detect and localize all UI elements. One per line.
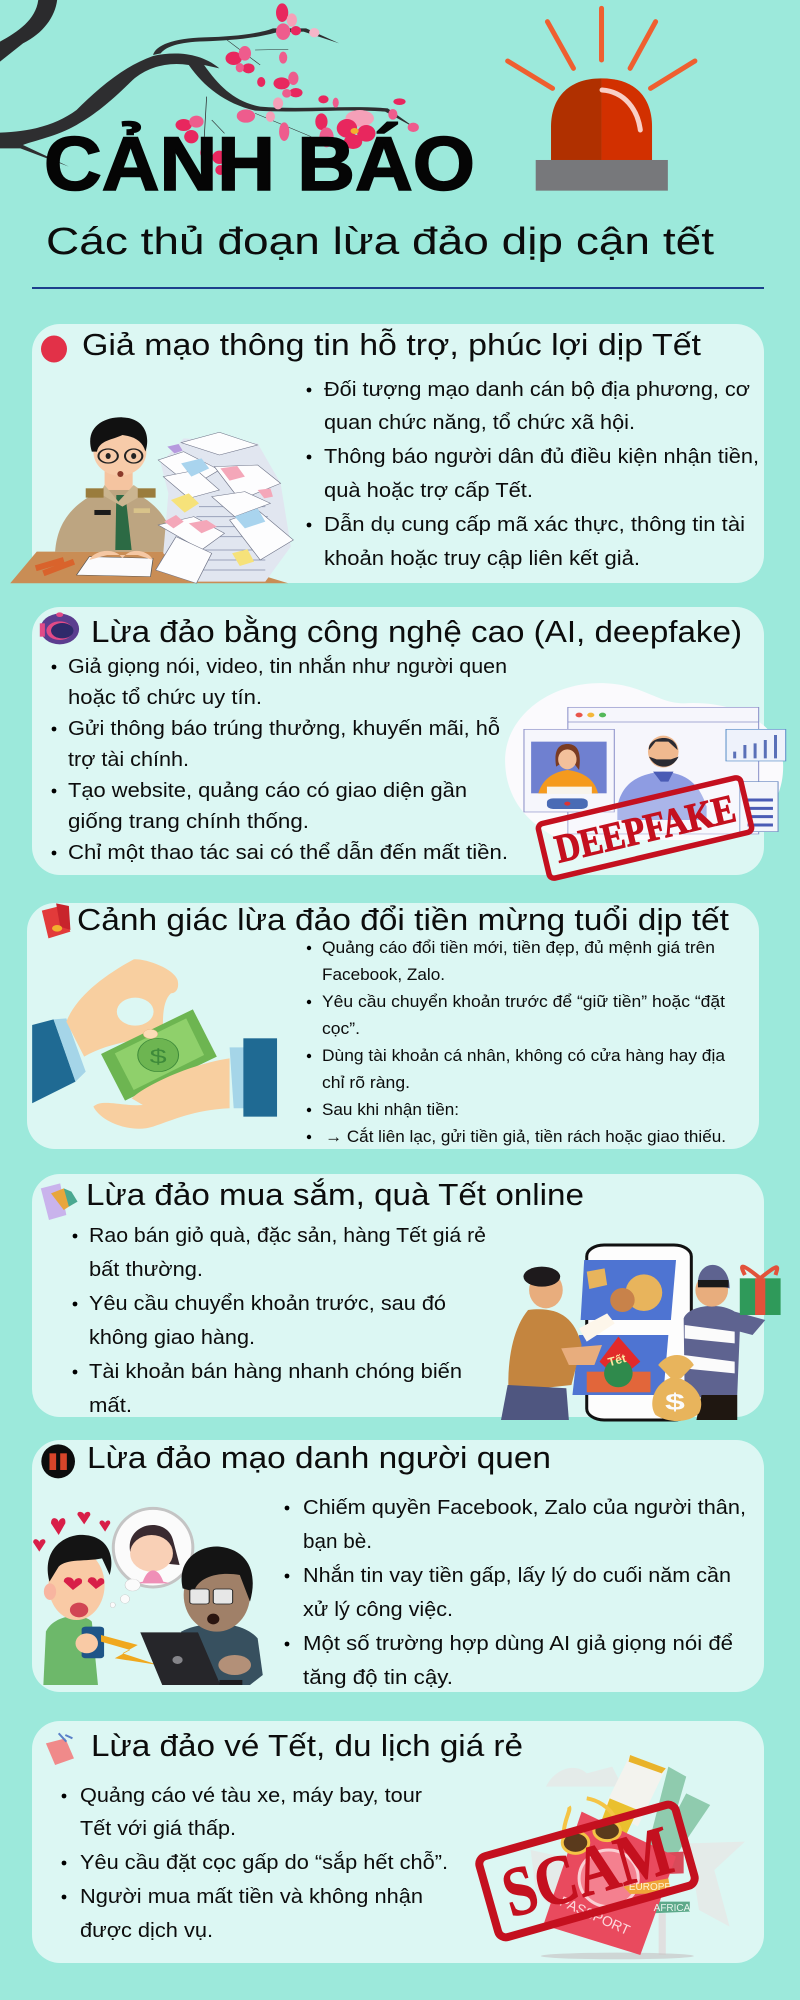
bullet list: Đối tượng mạo danh cán bộ địa phương, cơ: [324, 379, 750, 401]
bullet list: Giả giọng nói, video, tin nhắn như người quen: [68, 655, 507, 678]
icon: siren: [508, 8, 695, 191]
bullet list: Yêu cầu đặt cọc gấp do “sắp hết chỗ”.: [80, 1851, 448, 1874]
bullet list: Rao bán giỏ quà, đặc sản, hàng Tết giá rẻ: [89, 1225, 486, 1247]
label: Africa sign: AFRICA: [654, 1903, 691, 1914]
stamp: SCAM: SCAM: [494, 1812, 681, 1933]
bullet list: Dẫn dụ cung cấp mã xác thực, thông tin tài: [324, 513, 745, 536]
bullet list: xử lý công việc.: [303, 1599, 453, 1621]
bullet list: [285, 1497, 746, 1689]
heading: Cảnh giác lừa đảo đổi tiền mừng tuổi dịp tết: [77, 902, 729, 937]
panel: công nghệ cao: [32, 607, 786, 879]
bullet list: [307, 379, 759, 570]
panel background: [27, 903, 759, 1149]
bullet list: Yêu cầu chuyển khoản trước để “giữ tiền” hoặc “đặt: [322, 993, 725, 1011]
panel background: [32, 1174, 764, 1417]
bullet list: Yêu cầu chuyển khoản trước, sau đó: [89, 1293, 446, 1315]
icon: passport: [46, 1733, 74, 1765]
icon: robot: [40, 612, 79, 644]
bullet list: [73, 1225, 486, 1417]
bullet list: Tài khoản bán hàng nhanh chóng biến: [89, 1361, 462, 1383]
bullet list: bạn bè.: [303, 1531, 372, 1553]
bullet list: bất thường.: [89, 1259, 203, 1281]
blossom branch: [0, 0, 419, 175]
panel: đổi tiền mừng tuổi: [27, 902, 759, 1149]
icon: couple badge: [41, 1444, 75, 1478]
panel background: [32, 607, 764, 875]
bullet list: [307, 939, 726, 1146]
heading: Lừa đảo mua sắm, quà Tết online: [86, 1177, 584, 1212]
bullet list: chỉ rõ ràng.: [322, 1074, 410, 1092]
heading: Lừa đảo bằng công nghệ cao (AI, deepfake): [91, 614, 742, 649]
panel background: [32, 324, 764, 583]
bullet list: cọc”.: [322, 1020, 360, 1038]
panel: mua sắm online: [32, 1174, 781, 1421]
illustration: online shopping scam: [501, 1245, 781, 1421]
bullet list: Dùng tài khoản cá nhân, không có cửa hàng hay địa: [322, 1047, 726, 1065]
panel: vé Tết du lịch: [32, 1721, 764, 1963]
bullet list: hoặc tổ chức uy tín.: [68, 687, 262, 709]
illustration: hands exchanging money: $: [150, 1046, 167, 1068]
label: Tết sign: Tết: [606, 1351, 627, 1369]
illustration: officer with paper pile: [10, 417, 293, 583]
bullet list: Quảng cáo đổi tiền mới, tiền đẹp, đủ mệnh giá trên: [322, 939, 715, 957]
illustration: deepfake video call: [505, 683, 786, 840]
bullet list: Facebook, Zalo.: [322, 966, 445, 984]
illustration: love scam: [33, 1508, 263, 1685]
panel background: [32, 1721, 764, 1963]
bullet list: không giao hàng.: [89, 1327, 255, 1349]
bullet list: Tết với giá thấp.: [80, 1818, 236, 1840]
bullet list: Một số trường hợp dùng AI giả giọng nói để: [303, 1633, 733, 1655]
bullet list: khoản hoặc truy cập liên kết giả.: [324, 548, 640, 570]
bullet list: Quảng cáo vé tàu xe, máy bay, tour: [80, 1785, 422, 1807]
illustration: hands exchanging money: [32, 959, 277, 1129]
heading: Lừa đảo vé Tết, du lịch giá rẻ: [91, 1728, 523, 1763]
bullet list: quan chức năng, tổ chức xã hội.: [324, 412, 635, 434]
bullet list: Gửi thông báo trúng thưởng, khuyến mãi, hỗ: [68, 717, 500, 740]
bullet list: Nhắn tin vay tiền gấp, lấy lý do cuối năm cần: [303, 1564, 731, 1587]
bullet list: → Cắt liên lạc, gửi tiền giả, tiền rách hoặc giao thiếu.: [325, 1127, 726, 1146]
bullet list: Người mua mất tiền và không nhận: [80, 1886, 423, 1908]
bullet list: tăng độ tin cậy.: [303, 1667, 453, 1689]
label: passport: PASSPORT: [558, 1893, 633, 1938]
bullet list: [52, 655, 508, 864]
bullet list: [62, 1785, 448, 1942]
bullet list: giống trang chính thống.: [68, 811, 309, 833]
bullet list: được dịch vụ.: [80, 1920, 213, 1942]
illustration: travel scam: [531, 1755, 745, 1959]
panel: mạo danh người quen: [32, 1440, 764, 1692]
bullet list: quà hoặc trợ cấp Tết.: [324, 480, 533, 502]
icon: phone and bags: [41, 1183, 78, 1220]
panel background: [32, 1440, 764, 1692]
bullet list: trợ tài chính.: [68, 749, 189, 771]
label: Europe sign: EUROPE: [629, 1882, 671, 1893]
stamp: DEEPFAKE: DEEPFAKE: [550, 785, 740, 872]
icon: red dot: [41, 336, 67, 362]
bullet list: Thông báo người dân đủ điều kiện nhận tiền,: [324, 446, 759, 468]
subtitle: Các thủ đoạn lừa đảo dịp cận tết: [46, 221, 715, 263]
bullet list: Chiếm quyền Facebook, Zalo của người thân,: [303, 1497, 746, 1519]
illustration: online shopping scam: $: [665, 1390, 685, 1415]
bullet list: Tạo website, quảng cáo có giao diện gần: [68, 780, 467, 802]
heading: Giả mạo thông tin hỗ trợ, phúc lợi dịp Tết: [82, 327, 701, 362]
bullet list: mất.: [89, 1395, 132, 1417]
icon: red envelopes: [42, 903, 70, 938]
heading: Lừa đảo mạo danh người quen: [87, 1440, 551, 1475]
title: CẢNH BÁO: [44, 122, 475, 207]
bullet list: Chỉ một thao tác sai có thể dẫn đến mất tiền.: [68, 841, 508, 864]
panel: giả mạo thông tin: [10, 324, 764, 583]
bullet list: Sau khi nhận tiền:: [322, 1101, 459, 1119]
